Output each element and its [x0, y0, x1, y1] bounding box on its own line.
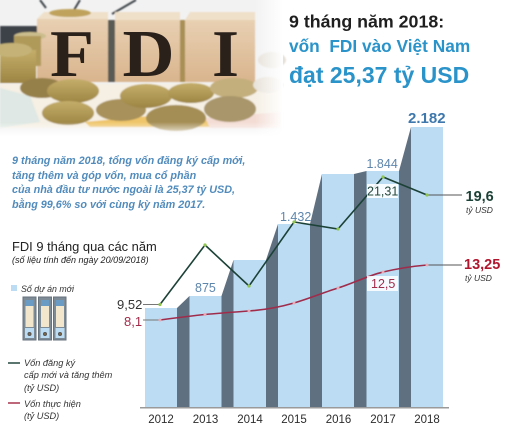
- end label 19,6: tỷ USD: [466, 205, 493, 215]
- project count labels: [195, 110, 446, 295]
- x axis years: 2015: [281, 414, 307, 426]
- chart heading: [12, 239, 157, 265]
- x axis years: [148, 414, 440, 426]
- project count labels: 875: [195, 281, 216, 295]
- intro text block: bằng 99,6% so với cùng kỳ năm 2017.: [12, 198, 205, 211]
- FDI letters: [50, 17, 239, 91]
- intro text block: [12, 155, 245, 211]
- end label 13,25: 13,25: [464, 257, 500, 273]
- end label 19,6: [466, 189, 494, 215]
- start labels: 8,1: [124, 314, 142, 329]
- start labels: [117, 297, 142, 329]
- label 12,5: 12,5: [371, 277, 395, 291]
- line: implemented capital: [143, 264, 462, 322]
- title: đạt 25,37 tỷ USD: [289, 62, 469, 88]
- x axis years: 2017: [370, 414, 396, 426]
- title: vốn FDI vào Việt Nam: [289, 36, 470, 56]
- project count labels: 2.182: [408, 110, 446, 127]
- intro text block: tăng thêm và góp vốn, mua cổ phần: [12, 170, 197, 182]
- title: [289, 12, 470, 88]
- legend: implemented capital: [8, 399, 81, 421]
- end label 13,25: tỷ USD: [465, 273, 492, 283]
- label 21,31: 21,31: [367, 184, 398, 198]
- chart heading: FDI 9 tháng qua các năm: [12, 239, 157, 254]
- legend: registered capital: (tỷ USD): [24, 383, 59, 393]
- legend: registered capital: [8, 358, 113, 393]
- project count labels: 1.844: [366, 157, 398, 171]
- x axis years: 2013: [193, 414, 218, 426]
- intro text block: 9 tháng năm 2018, tổng vốn đăng ký cấp mới,: [12, 155, 245, 167]
- x axis years: 2016: [326, 414, 351, 426]
- FDI letters: D: [122, 17, 174, 91]
- legend: registered capital: Vốn đăng ký: [24, 358, 76, 368]
- legend: implemented capital: Vốn thực hiện: [24, 399, 81, 409]
- photo: FDI wooden blocks and coins: [0, 0, 286, 137]
- legend: new projects: Số dự án mới: [21, 284, 75, 294]
- title: 9 tháng năm 2018:: [289, 12, 444, 32]
- x axis years: 2018: [414, 414, 440, 426]
- project count labels: 1.432: [280, 210, 311, 224]
- legend: registered capital: cấp mới và tăng thêm: [24, 370, 113, 380]
- start labels: 9,52: [117, 297, 142, 312]
- end label 19,6: 19,6: [466, 189, 494, 205]
- FDI letters: I: [212, 17, 239, 91]
- x axis years: 2012: [148, 414, 174, 426]
- legend: implemented capital: (tỷ USD): [24, 411, 59, 421]
- intro text block: của nhà đầu tư nước ngoài là 25,37 tỷ USD,: [12, 184, 235, 196]
- FDI letters: F: [50, 17, 94, 91]
- legend: [8, 284, 113, 421]
- end label 13,25: [464, 257, 500, 283]
- bar chart: new projects: [140, 127, 449, 408]
- line: registered capital: [143, 175, 462, 306]
- x axis years: 2014: [237, 414, 263, 426]
- chart heading: (số liệu tính đến ngày 20/09/2018): [12, 255, 149, 265]
